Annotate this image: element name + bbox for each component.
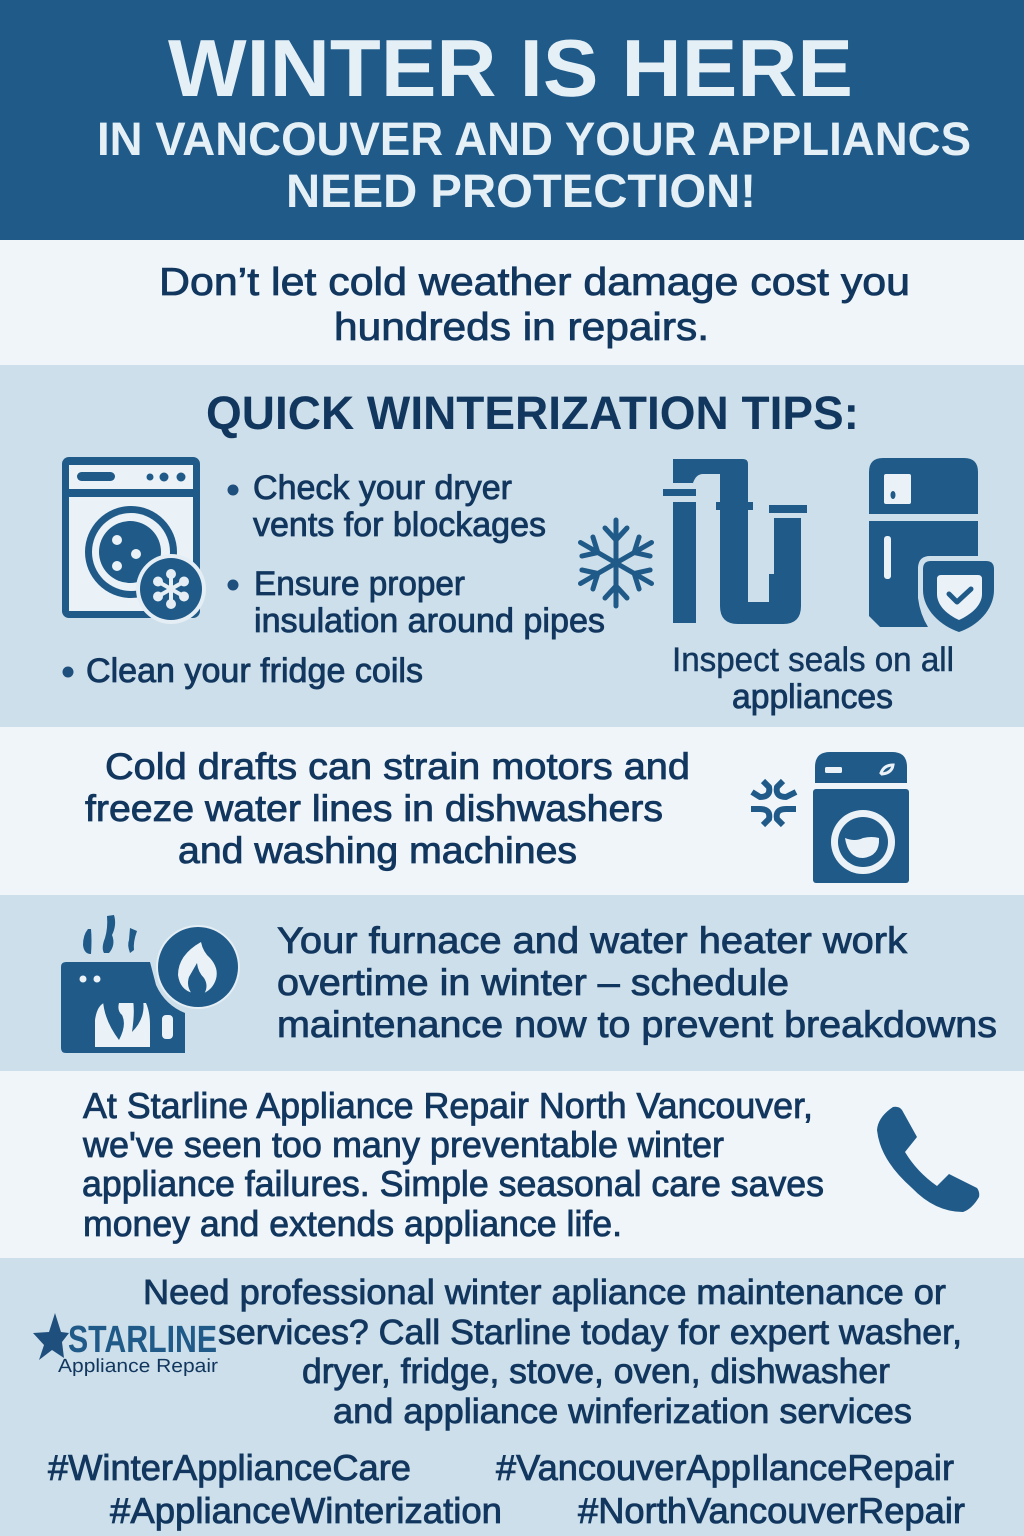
intro text [159,261,910,349]
subtitle: IN VANCOUVER AND YOUR APPLIANCS [97,112,971,165]
about text: we've seen too many preventable winter [82,1124,724,1165]
furnace text: overtime in winter – schedule [277,962,789,1003]
caption: inspect seals [672,641,954,716]
icon: cold arrows [751,781,796,825]
logo: Starline [33,1313,219,1377]
tip: dryer vents: Check your dryer [253,469,512,507]
panel: cold drafts [0,727,1024,895]
icon: washing machine [813,752,909,883]
intro text: Don’t let cold weather damage cost you [159,261,910,304]
tip: pipe insulation: Ensure proper [254,565,465,603]
panel: call to action [0,1258,1024,1536]
icon: fridge with shield [869,458,994,632]
logo: Starline: Appliance Repair [58,1356,219,1377]
icon: pipes [663,459,807,624]
hashtags: #WinterApplianceCare [48,1447,411,1488]
icon: dryer with snowflake badge [62,457,206,624]
call to action text: dryer, fridge, stove, oven, dishwasher [302,1352,890,1391]
call to action text: Need professional winter apliance maintenance or [143,1273,946,1312]
hashtags: #NorthVancouverRepair [578,1490,965,1531]
tip: dryer vents: vents for blockages [253,506,546,544]
panel: warning intro [0,240,1024,365]
icon: phone [877,1107,979,1212]
furnace text [277,920,997,1045]
about text: At Starline Appliance Repair North Vancouver, [83,1085,813,1126]
title: WINTER IS HERE [168,24,853,114]
caption: inspect seals: Inspect seals on all [672,641,954,679]
panel: quick winterization tips [0,365,1024,727]
hashtags: #ApplianceWinterization [110,1490,502,1531]
about text [82,1085,824,1244]
about text: appliance failures. Simple seasonal care saves [82,1163,824,1204]
tip: pipe insulation: insulation around pipes [254,602,605,640]
icon: furnace with flame [61,915,240,1053]
cold drafts text: Cold drafts can strain motors and [105,746,690,787]
call to action text [143,1273,962,1431]
tip: fridge coils: Clean your fridge coils [86,652,423,690]
logo: Starline: STARLINE [68,1319,217,1361]
cold drafts text: and washing machines [178,830,577,871]
call to action text: services? Call Starline today for expert washer, [218,1313,962,1352]
about text: money and extends appliance life. [83,1203,622,1244]
tip: dryer vents [228,469,546,544]
panel: furnace [0,895,1024,1071]
panel: header [0,0,1024,240]
tip: pipe insulation [228,565,605,640]
intro text: hundreds in repairs. [334,306,709,349]
cold drafts text [85,746,690,871]
tips heading: QUICK WINTERIZATION TIPS: [206,386,859,439]
hashtags [48,1447,965,1531]
furnace text: Your furnace and water heater work [277,920,908,961]
subtitle [97,112,971,217]
subtitle: NEED PROTECTION! [286,164,756,217]
cold drafts text: freeze water lines in dishwashers [85,788,663,829]
call to action text: and appliance winferization services [333,1392,912,1431]
panel: about Starline [0,1071,1024,1258]
icon: snowflake [575,520,657,606]
furnace text: maintenance now to prevent breakdowns [277,1004,997,1045]
caption: inspect seals: appliances [732,678,893,716]
hashtags: #VancouverAppIlanceRepair [496,1447,954,1488]
